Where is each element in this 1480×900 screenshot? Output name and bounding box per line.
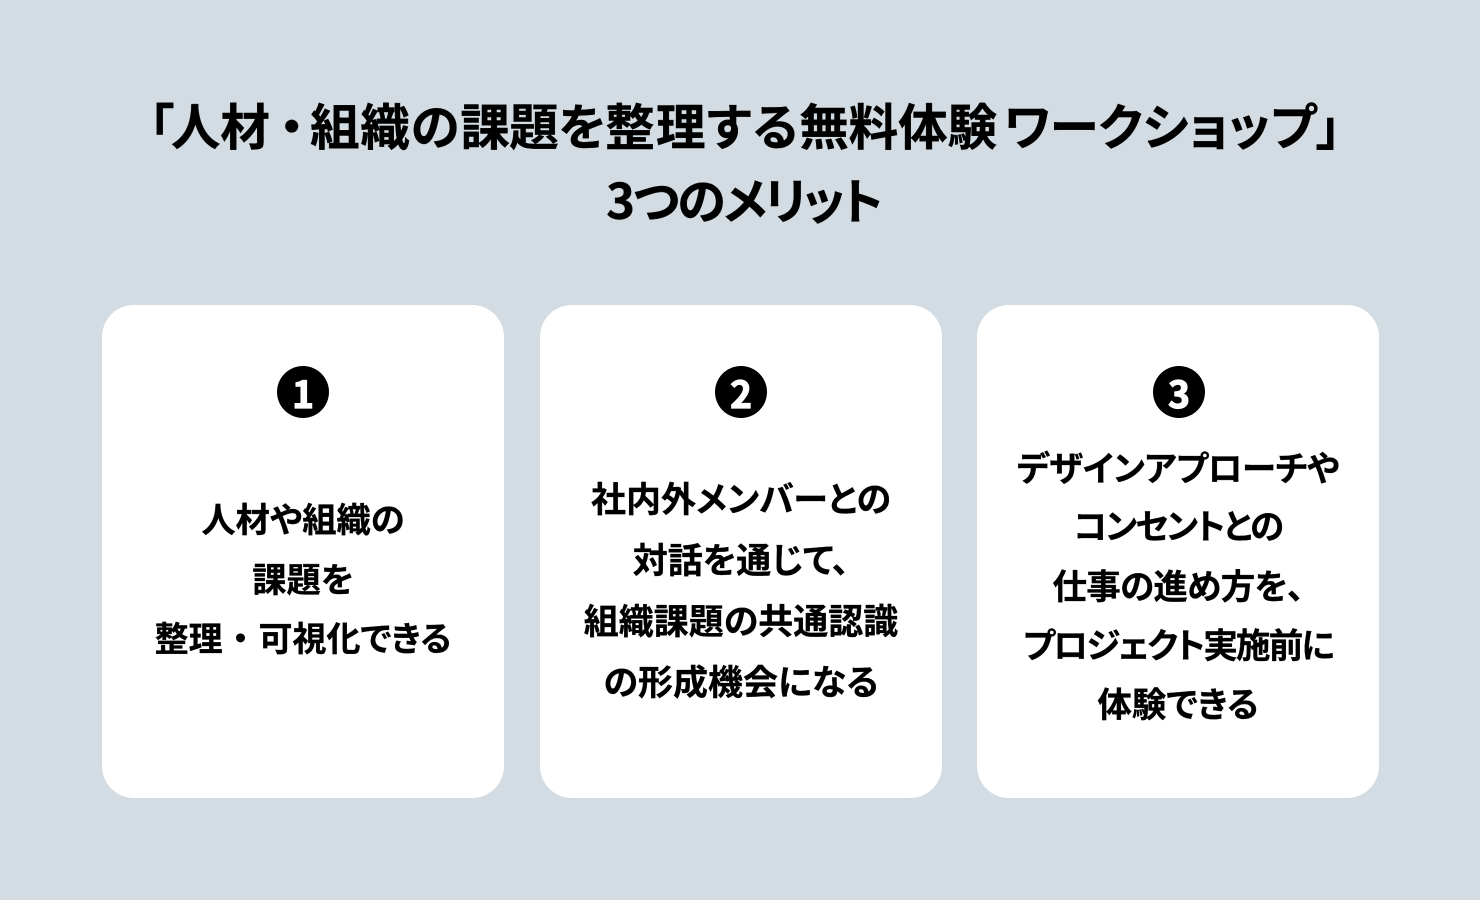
text: merit 3: 体験できる	[1097, 687, 1259, 725]
title: 「人材・組織の課題を整理する無料体験ワークショップ」	[149, 89, 1341, 160]
icon: number 2	[715, 366, 767, 418]
text: merit 3: デザインアプローチや	[1017, 451, 1339, 489]
text: merit 1: 人材や組織の	[201, 502, 405, 540]
text: merit 3: プロジェクト実施前に	[1023, 628, 1333, 666]
text: merit 2: 社内外メンバーとの	[591, 481, 891, 520]
icon: number 1: 1	[292, 365, 314, 419]
icon: number 3	[1153, 366, 1205, 418]
icon: number 1	[277, 366, 329, 418]
text: merit 3: 仕事の進め方を、	[1052, 569, 1303, 607]
text: merit 2: の形成機会になる	[604, 664, 878, 703]
panel: merit 1	[102, 305, 504, 798]
text: merit 1: 整理 ・ 可視化できる	[155, 621, 451, 659]
text: merit 3: コンセントとの	[1074, 509, 1282, 547]
title	[149, 89, 1341, 234]
text: merit 3	[1017, 450, 1339, 725]
text: merit 1: 課題を	[252, 562, 354, 600]
title: 3つのメリット	[606, 163, 880, 234]
panel: merit 2	[540, 305, 942, 798]
text: merit 1	[155, 502, 451, 659]
icon: number 3: 3	[1168, 365, 1190, 419]
text: merit 2: 対話を通じて、	[633, 542, 849, 581]
text: merit 2	[584, 481, 898, 703]
icon: number 2: 2	[730, 365, 752, 419]
panel: merit 3	[977, 305, 1379, 798]
text: merit 2: 組織課題の共通認識	[584, 603, 898, 642]
